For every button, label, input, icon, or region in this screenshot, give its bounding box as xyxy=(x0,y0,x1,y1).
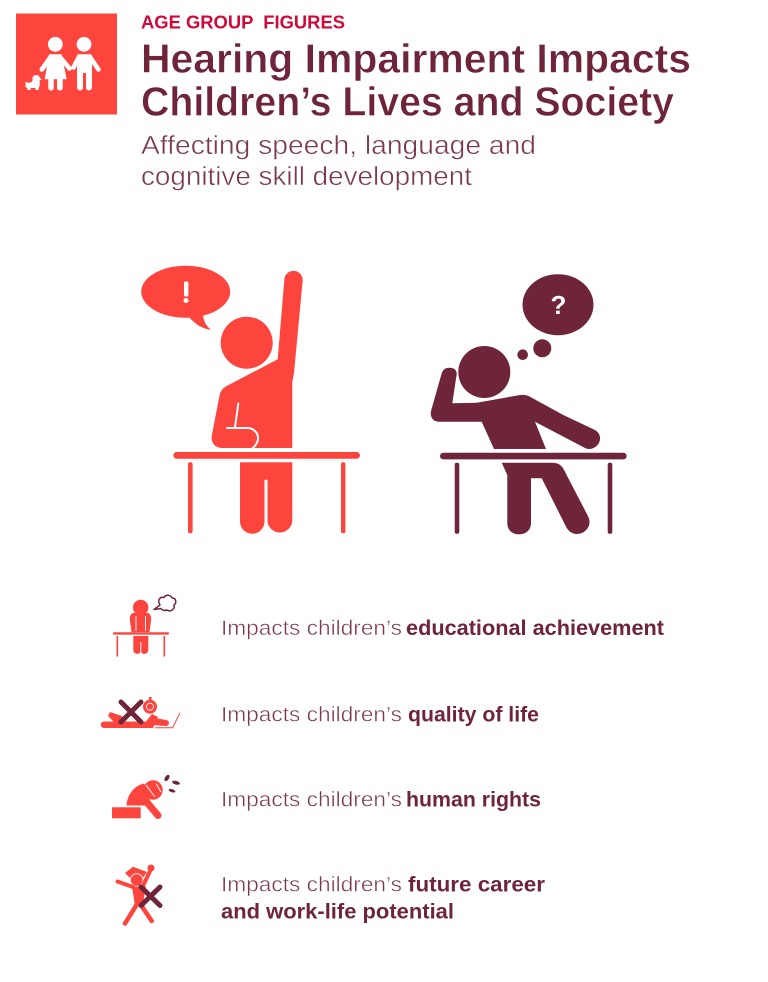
head xyxy=(221,317,273,369)
thought bubble with question mark: ? xyxy=(551,290,566,320)
icon: child lying down with cross xyxy=(101,697,180,728)
text: Impacts children’s xyxy=(221,788,402,812)
text: Impacts children’s xyxy=(221,616,402,640)
text xyxy=(221,616,664,640)
text: future career xyxy=(408,873,546,897)
title xyxy=(141,36,691,124)
desk xyxy=(440,453,627,534)
thought bubble with question mark xyxy=(517,274,594,360)
illustration: engaged child raising hand xyxy=(141,266,360,534)
title: Children’s Lives and Society xyxy=(141,78,674,124)
row 1: educational achievement xyxy=(113,595,664,656)
desk xyxy=(173,452,360,533)
text: educational achievement xyxy=(406,616,664,640)
eyebrow label: AGE GROUP FIGURES xyxy=(141,11,345,32)
row 4: future career xyxy=(118,864,546,924)
text xyxy=(221,873,546,923)
icon: graduate with cross xyxy=(118,864,160,924)
title: Hearing Impairment Impacts xyxy=(141,36,691,82)
row 3: human rights xyxy=(112,774,541,818)
icon: child with head in hands xyxy=(112,774,180,818)
text: Impacts children’s xyxy=(221,873,402,897)
icon: frustrated child at desk xyxy=(113,595,176,656)
text: and work-life potential xyxy=(221,899,454,923)
text: human rights xyxy=(406,788,541,812)
legs xyxy=(502,463,589,534)
torso and arms xyxy=(431,368,600,449)
illustration: confused child xyxy=(431,274,627,534)
text xyxy=(221,703,539,727)
head xyxy=(458,346,510,398)
icon: children badge xyxy=(16,14,117,114)
legs xyxy=(240,462,292,534)
subtitle xyxy=(141,132,536,191)
text: quality of life xyxy=(408,703,539,727)
subtitle: Affecting speech, language and xyxy=(141,132,536,160)
text xyxy=(221,788,541,812)
raised arm and torso xyxy=(212,271,303,449)
speech bubble with exclamation mark xyxy=(141,266,230,330)
text: Impacts children’s xyxy=(221,703,402,727)
row 2: quality of life xyxy=(101,697,539,728)
subtitle: cognitive skill development xyxy=(141,163,472,191)
